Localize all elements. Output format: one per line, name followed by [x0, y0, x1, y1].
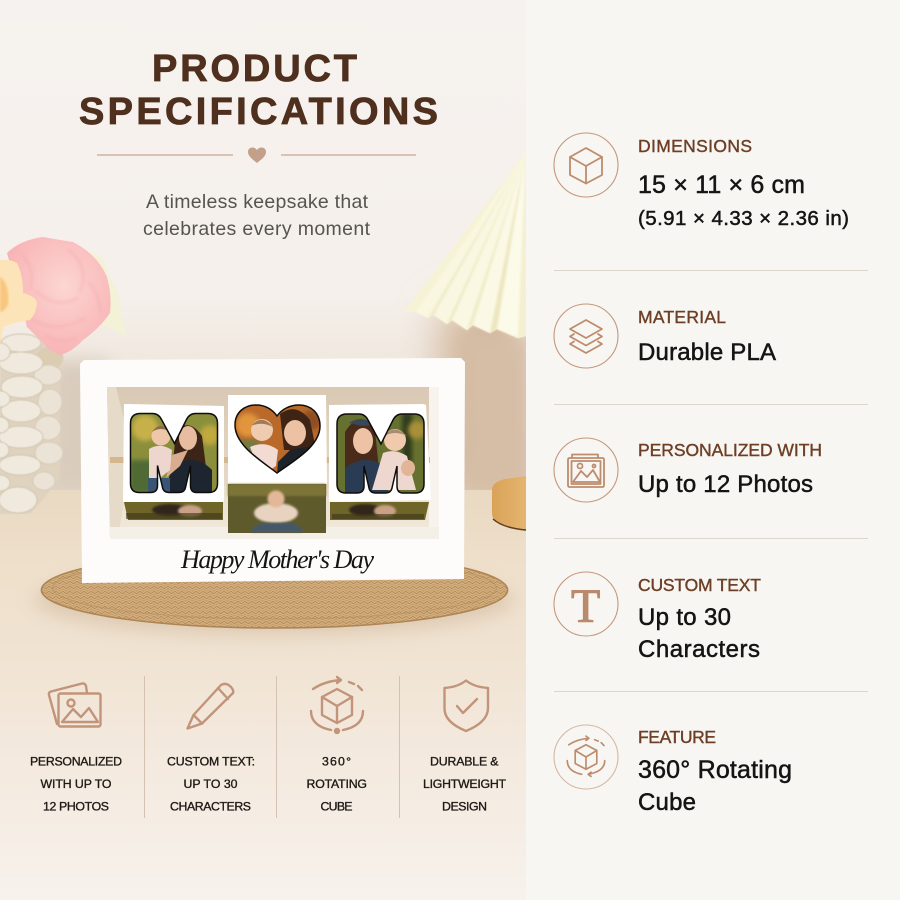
- spec: dimensions: 15 × 11 × 6 cm: [638, 171, 805, 199]
- spec: material: [554, 304, 776, 368]
- spec: custom text: Characters: [638, 636, 760, 663]
- caption: rotating cube: ROTATING: [306, 777, 367, 791]
- woven round mat: [34, 552, 514, 636]
- spec: material: MATERIAL: [638, 307, 726, 327]
- caption: rotating cube: 360°: [322, 754, 351, 768]
- icon: pencil: [188, 684, 233, 728]
- spec: custom text: CUSTOM TEXT: [638, 575, 761, 595]
- product: white photo frame: [80, 358, 465, 583]
- spec: dimensions: [554, 133, 849, 230]
- vase of rope knots: [0, 334, 63, 514]
- divider: [144, 676, 400, 818]
- spec: feature: [554, 725, 792, 816]
- caption: custom text: CHARACTERS: [170, 800, 251, 814]
- icon: serif T: [554, 572, 618, 636]
- caption: rotating cube: [306, 754, 367, 814]
- spec: feature: FEATURE: [638, 727, 716, 747]
- center cube lower photo: [228, 484, 326, 533]
- caption: custom text: [167, 754, 255, 814]
- panel: specifications: [526, 0, 900, 900]
- icon: layers: [554, 304, 618, 368]
- panel: product photo background: [0, 0, 526, 900]
- caption: durable: [423, 754, 506, 814]
- icon: rotating cube: [554, 725, 618, 789]
- spec: personalized: PERSONALIZED WITH: [638, 440, 822, 460]
- right cube lower photo strip: [330, 502, 429, 520]
- caption: photos: PERSONALIZED: [30, 754, 122, 768]
- flowers: [0, 237, 127, 355]
- subtitle: celebrates every moment: [143, 218, 371, 240]
- left cube lower photo strip: [124, 502, 223, 520]
- caption: durable: DESIGN: [442, 800, 487, 814]
- engraved script message: Happy Mother's Day: [180, 545, 374, 574]
- feature strip: bottom left: [30, 676, 506, 818]
- left photo cube: [123, 404, 224, 520]
- spec: personalized: [554, 438, 822, 502]
- lamp shade: [404, 152, 526, 338]
- spec: feature: 360° Rotating: [638, 756, 792, 784]
- lamp wooden base: [492, 476, 526, 530]
- icon: photos: [554, 438, 618, 502]
- caption: photos: [30, 754, 122, 814]
- title: SPECIFICATIONS: [79, 91, 438, 133]
- title: PRODUCT: [152, 48, 357, 90]
- spec: custom text: Up to 30: [638, 604, 731, 631]
- spec: feature: Cube: [638, 789, 696, 816]
- caption: rotating cube: CUBE: [320, 800, 352, 814]
- caption: custom text: CUSTOM TEXT:: [167, 754, 255, 768]
- caption: durable: LIGHTWEIGHT: [423, 777, 506, 791]
- caption: photos: WITH UP TO: [40, 777, 112, 791]
- spec: personalized: Up to 12 Photos: [638, 471, 813, 498]
- subtitle: [143, 191, 371, 240]
- caption: photos: 12 PHOTOS: [43, 800, 109, 814]
- caption: custom text: UP TO 30: [184, 777, 238, 791]
- right photo cube: [329, 404, 431, 520]
- spec: dimensions: DIMENSIONS: [638, 136, 752, 156]
- icon: shield: [444, 680, 488, 731]
- center photo cube: [228, 395, 327, 533]
- icon: rotating cube: [311, 677, 363, 733]
- icon: cube: [554, 133, 618, 197]
- caption: durable: DURABLE &: [430, 754, 499, 768]
- subtitle: A timeless keepsake that: [146, 191, 369, 213]
- spec: custom text: [554, 572, 761, 663]
- frame window: [107, 387, 439, 539]
- spec: dimensions: (5.91 × 4.33 × 2.36 in): [638, 207, 849, 230]
- heading divider with heart: [97, 148, 416, 163]
- spec: material: Durable PLA: [638, 339, 776, 366]
- title: [79, 48, 438, 133]
- icon: photos: [49, 683, 100, 726]
- icon: serif T: T: [571, 580, 600, 633]
